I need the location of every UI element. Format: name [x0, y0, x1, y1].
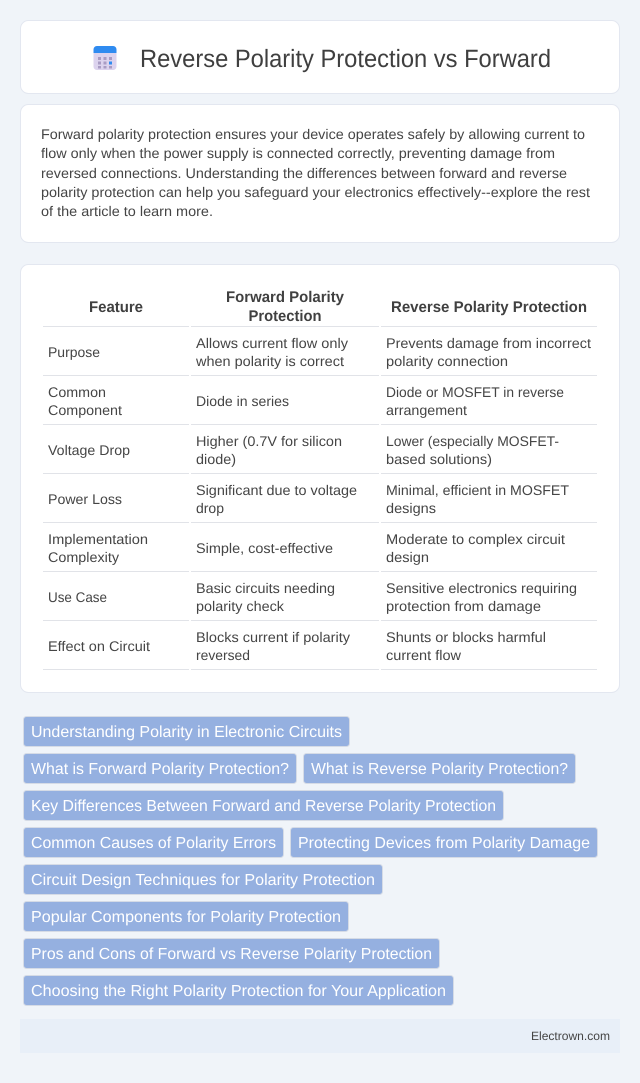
intro text: reversed connections. Understanding the differences between forward and reverse	[41, 165, 567, 181]
row: implementation complexity: Complexity	[48, 549, 119, 565]
comparison table card	[20, 264, 620, 692]
row: voltage drop: Voltage Drop	[48, 442, 130, 458]
table header: Reverse Polarity Protection	[391, 299, 587, 316]
row: purpose: Allows current flow only	[196, 335, 348, 351]
intro text: Forward polarity protection ensures your device operates safely by allowing current to	[41, 126, 585, 142]
tag	[290, 828, 598, 858]
row: purpose: Prevents damage from incorrect	[386, 335, 591, 351]
row: implementation complexity	[48, 531, 565, 565]
row: common component: Component	[48, 402, 122, 418]
icon: calendar	[94, 46, 116, 70]
table header: Forward Polarity	[226, 289, 344, 306]
row: voltage drop: Higher (0.7V for silicon	[196, 433, 342, 449]
row: purpose: Purpose	[48, 344, 100, 360]
row: purpose	[48, 335, 591, 369]
tag	[304, 754, 576, 784]
tag: Popular Components for Polarity Protection	[31, 909, 341, 926]
tag: Understanding Polarity in Electronic Circuits	[31, 724, 342, 741]
tag	[24, 902, 348, 932]
row: effect on circuit	[48, 629, 546, 663]
tag: Circuit Design Techniques for Polarity Protection	[31, 872, 375, 889]
row: common component	[48, 384, 564, 418]
table header: Feature	[89, 299, 143, 316]
tag: What is Forward Polarity Protection?	[31, 761, 289, 778]
tag: Key Differences Between Forward and Reverse Polarity Protection	[31, 798, 496, 815]
table header: Protection	[248, 308, 322, 325]
tag: Choosing the Right Polarity Protection for Your Application	[31, 983, 446, 1000]
row: power loss	[48, 482, 569, 516]
row: power loss: drop	[196, 500, 224, 516]
tag: Pros and Cons of Forward vs Reverse Polarity Protection	[31, 946, 432, 963]
row: use case: Basic circuits needing	[196, 580, 335, 596]
row: voltage drop	[48, 433, 559, 467]
row: power loss: Significant due to voltage	[196, 482, 357, 498]
footer: Electrown.com	[531, 1029, 610, 1043]
tag	[24, 790, 504, 820]
tag: What is Reverse Polarity Protection?	[311, 761, 568, 778]
tag: Protecting Devices from Polarity Damage	[298, 835, 590, 852]
row: effect on circuit: Effect on Circuit	[48, 638, 150, 654]
tag: Common Causes of Polarity Errors	[31, 835, 276, 852]
row: power loss: Minimal, efficient in MOSFET	[386, 482, 569, 498]
row: purpose: polarity connection	[386, 353, 508, 369]
row: effect on circuit: current flow	[386, 647, 462, 663]
tag	[24, 828, 284, 858]
row: voltage drop: diode)	[196, 451, 236, 467]
row: voltage drop: Lower (especially MOSFET-	[386, 433, 559, 449]
row: power loss: Power Loss	[48, 491, 122, 507]
row: use case	[48, 580, 577, 614]
row: implementation complexity: Moderate to complex circuit	[386, 531, 565, 547]
row: common component: Diode or MOSFET in reverse	[386, 384, 564, 400]
row: use case: Sensitive electronics requiring	[386, 580, 577, 596]
row: purpose: when polarity is correct	[195, 353, 344, 369]
tag	[24, 864, 382, 894]
header card	[20, 20, 620, 94]
title: Reverse Polarity Protection vs Forward	[140, 45, 551, 73]
row: implementation complexity: Implementation	[48, 531, 148, 547]
row: power loss: designs	[386, 500, 436, 516]
intro text: flow only when the power supply is connected correctly, preventing damage from	[41, 145, 555, 161]
row: effect on circuit: Shunts or blocks harmful	[386, 629, 546, 645]
topic tags	[24, 716, 598, 1006]
table header	[89, 289, 587, 325]
row: use case: polarity check	[196, 598, 285, 614]
row: common component: Diode in series	[196, 393, 289, 409]
row: effect on circuit: Blocks current if polarity	[196, 629, 350, 645]
tag	[24, 976, 454, 1006]
row: use case: Use Case	[48, 589, 107, 605]
tag	[24, 754, 296, 784]
tag	[24, 716, 350, 746]
row: common component: arrangement	[386, 402, 467, 418]
row: common component: Common	[48, 384, 106, 400]
tag	[24, 938, 440, 968]
intro text	[41, 126, 590, 219]
row: effect on circuit: reversed	[196, 647, 250, 663]
intro card	[20, 104, 620, 242]
footer	[20, 1019, 620, 1053]
row: voltage drop: based solutions)	[386, 451, 492, 467]
row: use case: protection from damage	[386, 598, 541, 614]
intro text: of the article to learn more.	[41, 203, 213, 219]
row: implementation complexity: design	[386, 549, 429, 565]
intro text: polarity protection can help you safeguard your electronics effectively--explore the rest	[41, 184, 590, 200]
row: implementation complexity: Simple, cost-effective	[196, 540, 333, 556]
